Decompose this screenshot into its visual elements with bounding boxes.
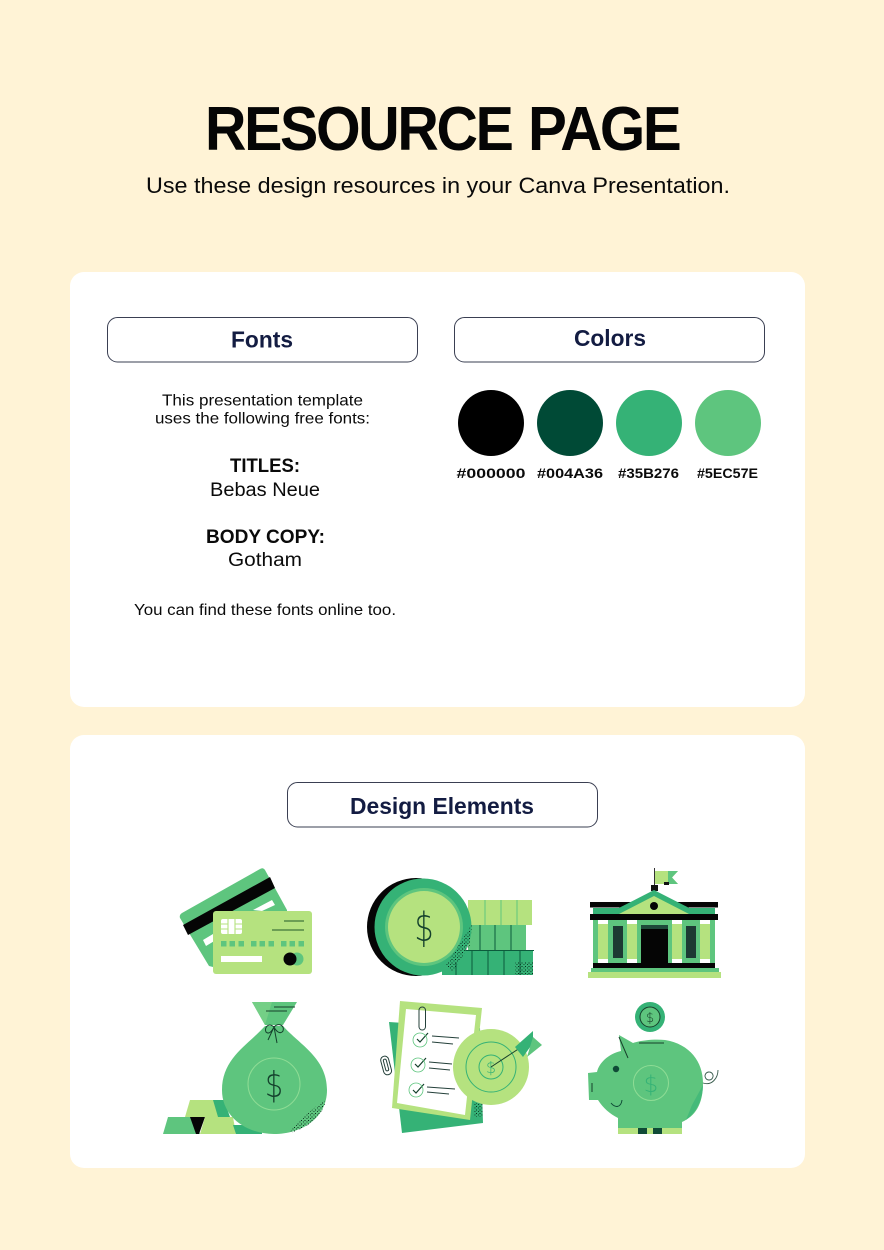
dollar sign: $ [265,1064,283,1106]
body copy font: Gotham [228,550,302,571]
dollar sign: $ [414,905,434,951]
icon: checklist and target: $ [486,1058,496,1077]
icon: piggy bank and coin: $ [646,1011,654,1026]
icon: money bag and gold bars [163,1002,327,1134]
swatch: green: #35B276 [618,465,679,481]
title: RESOURCE [205,94,512,163]
icon: piggy bank and coin: $ [644,1072,658,1098]
swatch: dark green [537,390,603,481]
fonts intro text: This presentation template [162,392,363,410]
icon: bank building [588,868,721,978]
fonts intro text: uses the following free fonts: [155,410,370,428]
title [205,94,680,163]
swatch: black: #000000 [456,465,526,481]
titles font: Bebas Neue [210,480,320,501]
icon: piggy bank and coin [588,1002,718,1134]
icon: coin stacks [367,878,534,976]
body copy font: BODY COPY: [206,527,325,548]
swatch: dark green: #004A36 [537,465,603,481]
panel: fonts and colors [70,272,805,707]
design elements heading [288,782,598,827]
swatch: light green: #5EC57E [697,465,758,481]
paper clip [380,1055,392,1076]
panel: design elements [70,735,805,1168]
swatch: light green [695,390,761,481]
titles font [210,456,320,501]
paper clip [419,1007,426,1030]
titles font: TITLES: [230,456,300,477]
fonts note: You can find these fonts online too. [134,602,396,619]
title: PAGE [528,94,680,163]
icon: credit cards [180,868,312,974]
colors heading: Colors [574,325,646,351]
subtitle: Use these design resources in your Canva Presentation. [146,173,730,198]
swatch: black [456,390,526,481]
fonts heading: Fonts [231,326,293,352]
colors heading [454,318,764,362]
icon: checklist and target [380,1001,542,1133]
fonts intro text [155,392,370,428]
fonts heading [108,318,418,362]
swatch: green [616,390,682,481]
body copy font [206,527,325,571]
design elements heading: Design Elements [350,793,534,819]
